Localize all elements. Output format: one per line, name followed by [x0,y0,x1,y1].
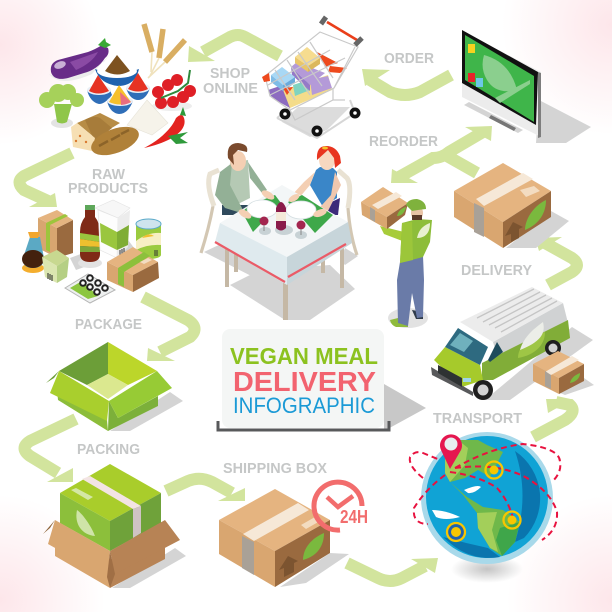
icon: ocean shade [443,451,540,558]
icon: map pin [440,434,462,469]
title line: delivery: DELIVERY [233,366,376,397]
label: packing: PACKING [77,442,140,458]
icon: chairs [201,170,357,255]
icon: woman [290,146,341,215]
icon: leaf on shipping box [303,533,324,560]
icon: van body [493,303,568,360]
icon: cap and head [406,199,426,220]
label: shop online: ONLINE [203,81,258,97]
icon: brown box flaps [48,520,110,577]
icon: tomatoes [152,70,196,111]
icon: noodle box [42,250,69,283]
label: transport: TRANSPORT [433,411,522,427]
label: order: ORDER [384,51,434,67]
icon: grille and bumper [431,367,473,396]
illustration: globe [410,432,560,583]
icon: cart wire basket [265,32,358,120]
icon: tablecloth [215,185,352,285]
illustration: green box in open brown box [43,464,186,588]
icon: wheels [473,380,493,400]
icon: box flaps [50,371,109,421]
illustration: shopping cart [262,17,362,138]
icon: table legs [225,246,344,320]
illustration: desktop monitor [462,30,591,143]
icon: flour pile [127,100,168,135]
icon: 24h clock [314,482,368,530]
icon: cart groceries [268,47,347,108]
icon: chili pepper [144,107,188,148]
icon: 24h clock: 24H [340,507,368,527]
illustration: packaged products [22,200,161,303]
icon: shoes [390,310,423,327]
arrow: box to globe [347,558,438,581]
arrow: packing to shipping box [166,479,245,501]
icon: tan package [38,210,73,258]
icon: leaf on box [525,200,546,230]
icon: jeans [397,256,424,326]
arrow: shop online to raw ingredients [188,35,280,62]
title line: infographic: INFOGRAPHIC [233,393,375,418]
icon: clouds [432,486,481,519]
icon: hands on table [237,188,328,221]
label: delivery: DELIVERY [461,263,532,279]
icon: held parcel [361,187,408,229]
icon: place settings [242,195,333,239]
arrow: package to packing [24,419,76,482]
label: shop online: SHOP [210,66,250,82]
label: reorder: REORDER [369,134,438,150]
icon: green jacket [380,219,432,263]
illustration: delivery van [431,287,593,400]
label: raw products: PRODUCTS [68,181,148,197]
icon: soy sauce bottle [22,232,44,273]
label: package: PACKAGE [75,317,142,333]
illustration: shipping box with 24h clock [219,482,368,587]
arrow: raw to products [20,153,72,207]
title panel [218,329,426,431]
illustration: raw food group [39,24,196,161]
icon: man [215,143,267,215]
icon: wheat [144,24,185,78]
icon: continents [445,440,520,556]
icon: eggplant [49,38,111,81]
illustration: delivery man with box [361,187,432,328]
arrow: reorder fork [391,126,492,183]
icon: sushi plate [65,274,115,303]
icon: leaf on green box [76,510,95,536]
title line: vegan meal: VEGAN MEAL [230,343,378,369]
icon: leaf on van [518,322,545,358]
icon: windshield [445,328,488,365]
icon: sauce bottle [78,205,102,268]
arrow: transport [533,399,573,437]
icon: up arrow on shipping box [279,556,298,577]
label: raw products [68,167,148,197]
label: shipping box: SHIPPING BOX [223,461,327,477]
arrow: delivery [535,237,577,285]
icon: floor shadow [204,242,358,320]
illustration: couple at dining table [201,143,358,320]
icon: food can [136,219,161,259]
icon: spice bowls [87,55,150,114]
icon: dashed routes [410,444,560,540]
icon: parcel [107,247,159,292]
illustration: large cardboard box [454,163,569,248]
icon: up arrow on box [505,222,523,242]
icon: broccoli [39,84,84,128]
label: shop online [203,66,258,97]
icon: milk carton [95,200,130,258]
label: raw products: RAW [92,167,125,183]
icon: location markers [447,462,520,541]
arrow: products to package [143,297,195,361]
arrow: order to cart [362,69,451,95]
illustration: open green box [46,342,183,431]
icon: small parcel by van [533,351,594,395]
icon: bread [71,113,143,161]
icon: leaf watermark [483,55,530,103]
